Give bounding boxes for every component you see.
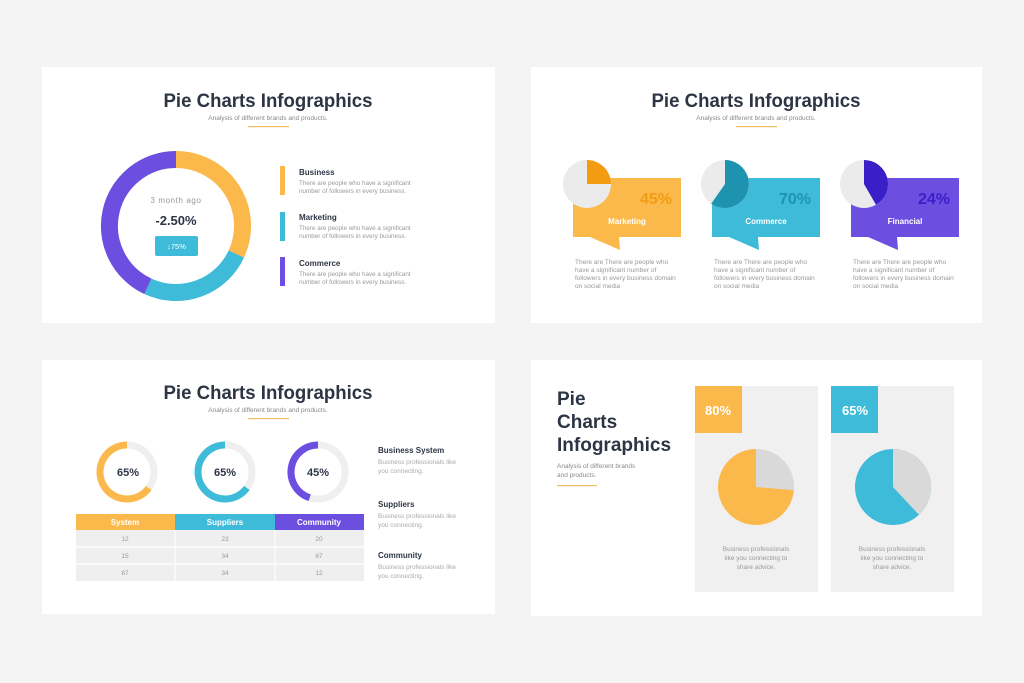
data table: Suppliers <box>207 518 244 527</box>
subtitle: Analysis of different brands and products. <box>208 115 328 122</box>
data table: System <box>111 518 139 527</box>
title: Pie Charts Infographics <box>164 383 372 404</box>
card: financial: 24% <box>918 191 950 208</box>
legend list: Suppliers <box>378 500 415 509</box>
data table: 12 <box>121 536 129 543</box>
card: commerce: on social media <box>714 283 760 290</box>
legend: number of followers in every business. <box>299 233 406 240</box>
panel: speech bubble pies <box>531 67 982 323</box>
title: Pie Charts Infographics <box>164 91 372 112</box>
data table <box>76 514 364 581</box>
legend: There are people who have a significant <box>299 180 411 187</box>
legend list: Business professionals like <box>378 564 456 571</box>
ring values: 65% <box>214 467 236 479</box>
ring charts <box>100 445 345 499</box>
legend: There are people who have a significant <box>299 225 411 232</box>
card: commerce: have a significant number of <box>714 267 795 274</box>
donut center text: -2.50% <box>155 213 197 228</box>
donut center text: ↓75% <box>167 242 186 251</box>
data table: 34 <box>221 570 229 577</box>
panel: donut chart slide <box>42 67 495 323</box>
data table: 12 <box>315 570 323 577</box>
legend list: Business System <box>378 446 444 455</box>
card: marketing <box>563 160 681 290</box>
card: financial: Financial <box>888 217 922 226</box>
card: financial <box>840 160 959 290</box>
donut center text: 3 month ago <box>150 196 202 205</box>
ring values: 65% <box>117 467 139 479</box>
card: marketing: Marketing <box>608 217 646 226</box>
card: marketing: have a significant number of <box>575 267 656 274</box>
subtitle: Analysis of different brands and products. <box>208 407 328 414</box>
legend list: you connecting. <box>378 468 424 475</box>
donut center text <box>150 196 202 256</box>
subtitle: Analysis of different brands <box>557 463 636 470</box>
card: commerce <box>701 160 820 290</box>
legend: Business <box>299 168 335 177</box>
card: 65%: share advice. <box>873 564 912 571</box>
card: marketing: on social media <box>575 283 621 290</box>
card: marketing: There are There are people who <box>575 259 668 266</box>
title <box>557 389 671 456</box>
legend <box>280 166 411 286</box>
legend list: Business professionals like <box>378 459 456 466</box>
card: commerce: There are There are people who <box>714 259 807 266</box>
legend: number of followers in every business. <box>299 188 406 195</box>
donut chart <box>109 159 243 293</box>
card: marketing: 45% <box>640 191 672 208</box>
data table: 20 <box>315 536 323 543</box>
legend list: you connecting. <box>378 522 424 529</box>
title: Pie Charts Infographics <box>652 91 860 112</box>
subtitle: Analysis of different brands and products. <box>696 115 816 122</box>
card: marketing: followers in every business domain <box>575 275 676 282</box>
card: 65%: like you connecting to <box>861 555 924 562</box>
card: financial: followers in every business domain <box>853 275 954 282</box>
legend list: Business professionals like <box>378 513 456 520</box>
card: 80%: Business professionals <box>723 546 790 553</box>
card: commerce: followers in every business domain <box>714 275 815 282</box>
card: financial: have a significant number of <box>853 267 934 274</box>
ring values: 45% <box>307 467 329 479</box>
panel: pie cards <box>531 360 982 616</box>
legend list: you connecting. <box>378 573 424 580</box>
legend list: Community <box>378 551 423 560</box>
data table: 87 <box>121 570 129 577</box>
panel: pie cards: and products. <box>557 472 597 479</box>
card: financial: There are There are people who <box>853 259 946 266</box>
card: 80%: share advice. <box>737 564 776 571</box>
card: commerce: Commerce <box>745 217 787 226</box>
legend: Marketing <box>299 213 337 222</box>
data table: 23 <box>221 536 229 543</box>
data table: 34 <box>221 553 229 560</box>
card: 80%: like you connecting to <box>725 555 788 562</box>
data table: 67 <box>315 553 323 560</box>
legend list <box>378 446 456 580</box>
data table: Community <box>297 518 342 527</box>
legend: There are people who have a significant <box>299 271 411 278</box>
card: 80%: 80% <box>705 403 731 418</box>
title: Infographics <box>557 435 671 456</box>
legend: Commerce <box>299 259 341 268</box>
card: 65%: Business professionals <box>859 546 926 553</box>
panel: ring charts with table <box>42 360 495 614</box>
title: Pie <box>557 389 586 410</box>
data table: 15 <box>121 553 129 560</box>
card: 65% <box>831 386 954 592</box>
card: commerce: 70% <box>779 191 811 208</box>
ring values <box>117 467 329 479</box>
card: financial: on social media <box>853 283 899 290</box>
card: 80% <box>695 386 818 592</box>
card: 65%: 65% <box>842 403 868 418</box>
legend: number of followers in every business. <box>299 279 406 286</box>
title: Charts <box>557 412 617 433</box>
